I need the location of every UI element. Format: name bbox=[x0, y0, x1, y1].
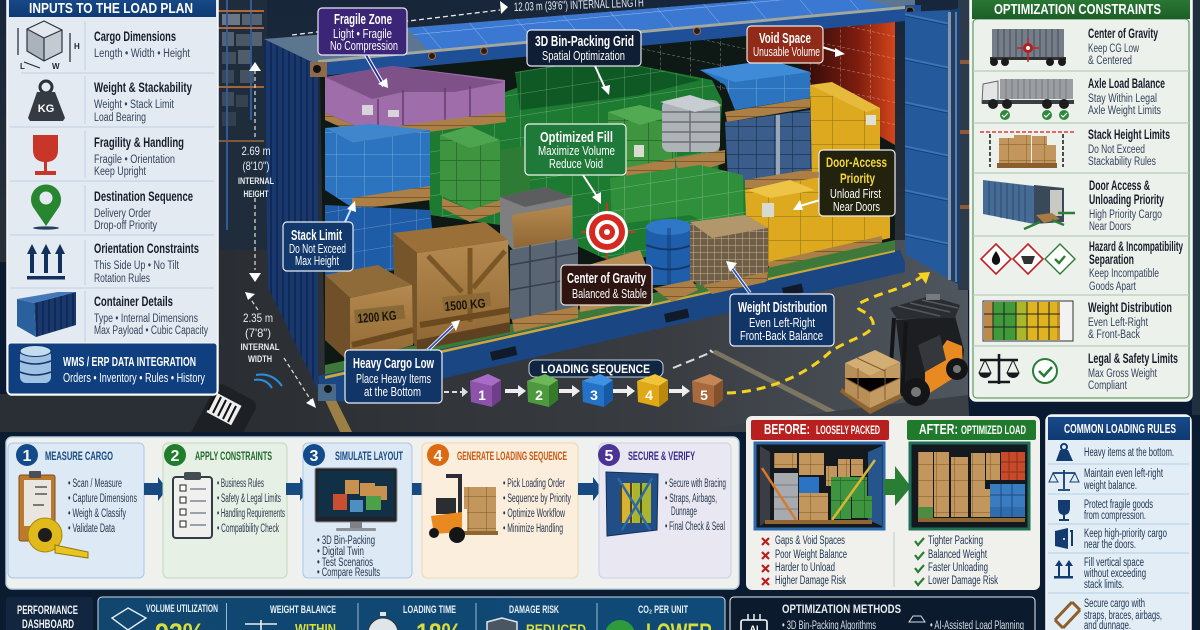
bullets step 1: • Scan / Measure bbox=[68, 478, 122, 490]
callout: fragile zone: No Compression bbox=[330, 39, 398, 53]
blue drums bbox=[646, 219, 698, 302]
step 2: apply constraints: APPLY CONSTRAINTS bbox=[195, 449, 272, 463]
void space red wall bbox=[800, 20, 895, 145]
callout: heavy cargo low: Place Heavy Items bbox=[356, 372, 431, 386]
text: legal and safety limits: Max Gross Weight bbox=[1088, 368, 1158, 380]
after heading bbox=[907, 420, 1036, 440]
text: weight distribution: Even Left-Right bbox=[1088, 317, 1149, 329]
step 4: generate loading sequence: GENERATE LOADING SEQUENCE bbox=[457, 449, 567, 463]
wire cage crate bbox=[690, 215, 768, 294]
cube 3: 3 bbox=[590, 387, 598, 403]
rule 2: Maintain even left-right bbox=[1084, 468, 1164, 480]
text: stack height limits bbox=[1088, 127, 1170, 168]
KPI: weight balance bbox=[245, 604, 336, 630]
text: cargo dimensions: Cargo Dimensions bbox=[94, 29, 176, 44]
cube 1: 1 bbox=[478, 387, 486, 403]
step 3: simulate layout: SIMULATE LAYOUT bbox=[335, 449, 403, 463]
icon: up arrows bbox=[1054, 560, 1073, 578]
bullets step 3: • 3D Bin-Packing bbox=[317, 535, 375, 547]
dimension: internal width: (7'8") bbox=[245, 326, 271, 340]
KPI: volume utilization: VOLUME UTILIZATION bbox=[146, 603, 218, 615]
icon: strap brace bbox=[1055, 602, 1080, 628]
KPI: loading time: LOADING TIME bbox=[403, 604, 456, 616]
list: after benefits: Balanced Weight bbox=[928, 549, 988, 561]
after heading: OPTIMIZED LOAD bbox=[961, 425, 1026, 437]
KPI: weight balance: WEIGHT BALANCE bbox=[270, 604, 336, 616]
text: fragility and handling: Fragile • Orientation bbox=[94, 154, 175, 166]
icon: stack height limits bbox=[980, 132, 1074, 168]
banner: WMS / ERP data integration: WMS / ERP DATA INTEGRATION bbox=[63, 354, 196, 369]
panel: before and after bbox=[746, 416, 1040, 590]
callout: door-access priority bbox=[793, 150, 895, 216]
callout: optimized fill: Maximize Volume bbox=[538, 144, 615, 158]
before heading: LOOSELY PACKED bbox=[816, 425, 880, 437]
loading sequence cubes bbox=[444, 374, 723, 407]
container doors bbox=[905, 8, 960, 285]
bullets step 2: • Handling Requirements bbox=[217, 508, 285, 520]
step 3: simulate layout bbox=[303, 443, 412, 579]
rule 5: without exceeding bbox=[1083, 568, 1146, 580]
text: stack height limits: Do Not Exceed bbox=[1088, 144, 1145, 156]
text: fragility and handling: Keep Upright bbox=[94, 166, 147, 178]
warehouse shelving backdrop bbox=[217, 0, 1200, 415]
icon: cube dimensions: H bbox=[74, 42, 80, 51]
after container illustration bbox=[910, 443, 1029, 529]
shipping container bbox=[264, 0, 960, 402]
bullets step 3: • Compare Results bbox=[317, 567, 380, 579]
step 2: apply constraints: 2 bbox=[171, 448, 180, 465]
cube 5 bbox=[692, 374, 723, 407]
icon: door access container bbox=[983, 180, 1075, 229]
crate: 1200 KG bbox=[325, 265, 413, 363]
callout: fragile zone: Light • Fragile bbox=[333, 27, 392, 41]
step 5: secure and verify: SECURE & VERIFY bbox=[628, 449, 695, 463]
text: weight and stackability: Weight & Stackability bbox=[94, 80, 192, 95]
callout: fragile zone: Fragile Zone bbox=[334, 12, 392, 28]
bullets step 3: • Digital Twin bbox=[317, 546, 364, 558]
text: stack height limits: Stackability Rules bbox=[1088, 156, 1156, 168]
text: destination sequence: Destination Sequence bbox=[94, 189, 193, 204]
step 4: generate loading sequence: 4 bbox=[434, 448, 443, 465]
rule 5 bbox=[1083, 557, 1146, 591]
weight label 1200: 1200 KG bbox=[357, 308, 397, 326]
yellow lower cargo bbox=[745, 172, 890, 276]
container interior bbox=[320, 20, 895, 378]
callout: void space: Unusable Volume bbox=[753, 45, 820, 59]
big arrow before to after bbox=[884, 466, 911, 506]
method list bbox=[782, 616, 1024, 630]
callout: door-access priority: Unload First bbox=[830, 187, 881, 201]
text: hazard and incompatibility separation: Goods Apart bbox=[1089, 281, 1137, 293]
container end wall bbox=[264, 39, 318, 390]
dimension: internal width: INTERNAL bbox=[240, 342, 280, 352]
callout: heavy cargo low bbox=[345, 320, 460, 403]
list: before drawbacks: Gaps & Void Spaces bbox=[775, 535, 845, 547]
callout: fragile zone bbox=[318, 8, 407, 88]
text: weight and stackability: Weight • Stack Limit bbox=[94, 99, 175, 111]
text: weight distribution: & Front-Back bbox=[1088, 329, 1140, 341]
cube 2: 2 bbox=[535, 387, 543, 403]
callout: optimized fill: Reduce Void bbox=[549, 157, 603, 171]
callout: void space: Void Space bbox=[759, 31, 811, 47]
step 5: secure and verify bbox=[598, 443, 731, 578]
panel: optimization constraints bbox=[970, 0, 1192, 401]
icon: cube dimensions: W bbox=[52, 62, 60, 71]
bullets step 5: • Straps, Airbags, bbox=[665, 493, 717, 505]
rule 6: straps, braces, airbags, bbox=[1084, 610, 1162, 622]
bullets step 5: • Secure with Bracing bbox=[665, 478, 726, 490]
text: orientation constraints bbox=[94, 241, 199, 285]
bullets step 4: • Pick Loading Order bbox=[503, 478, 565, 490]
cube 4 bbox=[637, 374, 668, 407]
text: orientation constraints: Orientation Constraints bbox=[94, 241, 199, 256]
rule 5: stack limits. bbox=[1084, 579, 1124, 591]
panel: optimization methods: OPTIMIZATION METHODS bbox=[782, 602, 901, 616]
rule 3: Protect fragile goods bbox=[1084, 499, 1153, 511]
text: weight and stackability: Load Bearing bbox=[94, 112, 146, 124]
white sacks bbox=[660, 95, 725, 177]
rule 4: near the doors. bbox=[1084, 539, 1136, 551]
icon: cube dimensions bbox=[18, 21, 80, 71]
cube 1 bbox=[470, 374, 501, 407]
KPI: damage risk: DAMAGE RISK bbox=[509, 604, 559, 616]
text: destination sequence: Drop-off Priority bbox=[94, 220, 157, 232]
dimension: internal height: INTERNAL bbox=[238, 176, 274, 186]
bullets step 4: • Sequence by Priority bbox=[503, 493, 571, 505]
bullets step 2 bbox=[217, 478, 285, 535]
arrow 3 to 4 bbox=[412, 477, 436, 501]
callout: 3D bin-packing grid bbox=[527, 30, 641, 95]
panel: KPI strip bbox=[98, 597, 725, 630]
dimension: internal height: HEIGHT bbox=[244, 189, 269, 199]
crate: 1500 KG bbox=[393, 222, 510, 350]
bullets step 1: • Weigh & Classify bbox=[68, 508, 126, 520]
bullets step 3: • Test Scenarios bbox=[317, 557, 373, 569]
callout: weight distribution: Weight Distribution bbox=[738, 300, 827, 316]
icon: AI chip bbox=[741, 614, 767, 630]
list: before drawbacks: Harder to Unload bbox=[775, 562, 835, 574]
text: hazard and incompatibility separation: Keep Incompatible bbox=[1089, 268, 1159, 280]
text: hazard and incompatibility separation bbox=[1089, 239, 1183, 293]
text: door access and unloading priority: High Priority Cargo bbox=[1089, 209, 1162, 221]
green translucent low block bbox=[610, 165, 744, 240]
panel: performance dashboard label bbox=[6, 597, 93, 630]
icon: checklist clipboard bbox=[173, 472, 212, 538]
arrow 1 to 2 bbox=[144, 477, 167, 501]
list: before drawbacks: Poor Weight Balance bbox=[775, 549, 847, 561]
text: destination sequence: Delivery Order bbox=[94, 208, 151, 220]
text: axle load balance: Stay Within Legal bbox=[1088, 93, 1157, 105]
panel: common loading rules bbox=[1046, 415, 1191, 630]
text: center of gravity: Center of Gravity bbox=[1088, 26, 1158, 41]
list: before drawbacks bbox=[762, 535, 847, 587]
callout: weight distribution: Front-Back Balance bbox=[740, 329, 823, 343]
before heading: BEFORE: bbox=[764, 421, 810, 438]
callout: door-access priority: Priority bbox=[840, 170, 875, 186]
rule 3 bbox=[1084, 499, 1153, 522]
arrow 2 to 3 bbox=[286, 477, 309, 501]
rule 5: Fill vertical space bbox=[1084, 557, 1144, 569]
step 1: measure cargo bbox=[8, 443, 144, 578]
step 3: simulate layout: 3 bbox=[310, 448, 319, 465]
stacked green boxes left bbox=[440, 126, 530, 222]
panel heading: INPUTS TO THE LOAD PLAN bbox=[29, 0, 193, 17]
callout: 3D bin-packing grid: Spatial Optimization bbox=[542, 49, 625, 63]
text: weight and stackability bbox=[94, 80, 192, 124]
icon: shipping container bbox=[17, 292, 76, 337]
bullets step 1: • Validate Data bbox=[68, 523, 115, 535]
rule 6: Secure cargo with bbox=[1084, 598, 1145, 610]
icon: cube dimensions: L bbox=[20, 62, 25, 71]
rule 2: weight balance. bbox=[1083, 480, 1137, 492]
bullets step 4: • Optimize Workflow bbox=[503, 508, 565, 520]
callout: stack limit bbox=[283, 201, 356, 271]
bullets step 5 bbox=[665, 478, 726, 533]
yellow upper cargo bbox=[810, 82, 880, 172]
blue wrapped top pallets bbox=[700, 60, 810, 122]
text: orientation constraints: This Side Up • No Tilt bbox=[94, 260, 180, 272]
step 5: secure and verify: 5 bbox=[605, 448, 614, 465]
container roof bbox=[264, 0, 915, 65]
cube 5: 5 bbox=[700, 387, 708, 403]
callout: optimized fill bbox=[525, 124, 626, 204]
panel: performance dashboard label: PERFORMANCE bbox=[17, 603, 78, 617]
loading sequence label bbox=[529, 350, 712, 377]
green floor and sill bbox=[325, 240, 895, 378]
icon: database bbox=[20, 346, 51, 383]
panel: five-step process bbox=[6, 437, 739, 589]
callout: heavy cargo low: Heavy Cargo Low bbox=[353, 356, 434, 372]
bullets step 3 bbox=[317, 535, 380, 579]
banner: WMS / ERP data integration bbox=[8, 343, 217, 394]
callout: weight distribution: Even Left-Right bbox=[749, 316, 815, 330]
text: fragility and handling: Fragility & Handling bbox=[94, 135, 184, 150]
icon: forklift bbox=[429, 476, 498, 543]
optimized fill green volume bbox=[425, 58, 752, 262]
bullets step 5: • Final Check & Seal bbox=[665, 521, 725, 533]
rule 3: from compression. bbox=[1084, 510, 1146, 522]
dimension: internal height bbox=[238, 62, 274, 282]
route arrow to doors bbox=[727, 272, 930, 393]
forklift with cartons bbox=[840, 294, 968, 414]
icon: heavy weight bbox=[1056, 444, 1073, 461]
bottom dark band bbox=[0, 432, 1200, 630]
cube 2 bbox=[527, 374, 558, 407]
dimension: internal length bbox=[292, 0, 644, 35]
bullets step 1: • Capture Dimensions bbox=[68, 493, 137, 505]
callout: center of gravity bbox=[561, 265, 652, 305]
bullets step 5: Dunnage bbox=[671, 506, 697, 518]
steel and wood crates centre bbox=[500, 187, 578, 332]
rule 6 bbox=[1084, 598, 1162, 630]
text: center of gravity: Keep CG Low bbox=[1088, 43, 1139, 55]
text: cargo dimensions bbox=[94, 29, 191, 60]
top beam bbox=[318, 5, 916, 76]
list: after benefits: Lower Damage Risk bbox=[928, 575, 998, 587]
dimension: internal height: (8'10") bbox=[242, 159, 270, 173]
text: legal and safety limits: Compliant bbox=[1088, 380, 1128, 392]
rules heading bbox=[1048, 417, 1190, 440]
callout: stack limit: Do Not Exceed bbox=[289, 242, 346, 256]
callout: door-access priority: Door-Access bbox=[826, 154, 887, 170]
step 1: measure cargo: 1 bbox=[23, 448, 32, 465]
text: container details: Type • Internal Dimensions bbox=[94, 313, 198, 325]
text: axle load balance: Axle Weight Limits bbox=[1088, 105, 1161, 117]
bullets step 4 bbox=[503, 478, 571, 535]
step 1: measure cargo: MEASURE CARGO bbox=[45, 449, 113, 463]
bullets step 4: • Minimize Handling bbox=[503, 523, 563, 535]
text: orientation constraints: Rotation Rules bbox=[94, 273, 150, 285]
icon: weight distribution top view bbox=[983, 301, 1073, 341]
bullets step 2: • Safety & Legal Limits bbox=[217, 493, 281, 505]
panel: optimization methods bbox=[730, 597, 1035, 630]
blue-gray crates bbox=[725, 110, 826, 190]
text: center of gravity bbox=[1088, 26, 1158, 67]
KPI: loading time bbox=[368, 604, 462, 630]
text: destination sequence bbox=[94, 189, 193, 232]
before container illustration bbox=[755, 443, 884, 529]
icon: monitor with simulation bbox=[315, 468, 397, 531]
icon: container centre of gravity bbox=[990, 29, 1066, 66]
dimension: internal width: WIDTH bbox=[248, 354, 272, 364]
callout: weight distribution bbox=[726, 261, 834, 346]
callout: door-access priority: Near Doors bbox=[833, 200, 880, 214]
KPI: CO2 per unit bbox=[605, 604, 712, 630]
callout: optimized fill: Optimized Fill bbox=[540, 130, 613, 146]
list: after benefits: Tighter Packing bbox=[928, 535, 983, 547]
callout: heavy cargo low: at the Bottom bbox=[364, 385, 421, 399]
step 2: apply constraints bbox=[163, 443, 287, 578]
bullets step 2: • Business Rules bbox=[217, 478, 264, 490]
list: after benefits bbox=[915, 535, 998, 587]
text: cargo dimensions: Length • Width • Height bbox=[94, 48, 191, 60]
text: container details: Container Details bbox=[94, 294, 173, 309]
step 4: generate loading sequence bbox=[422, 443, 578, 578]
text: fragility and handling bbox=[94, 135, 184, 178]
callout: center of gravity: Center of Gravity bbox=[567, 271, 646, 287]
banner: WMS / ERP data integration: Orders • Inventory • Rules • History bbox=[63, 371, 206, 385]
icon: kg weight bbox=[28, 81, 65, 121]
callout: stack limit: Max Height bbox=[295, 254, 339, 268]
weight label 1500: 1500 KG bbox=[444, 295, 486, 314]
icon: fragile glass bbox=[33, 135, 58, 175]
text: axle load balance bbox=[1088, 76, 1165, 117]
text: hazard and incompatibility separation: Separation bbox=[1089, 252, 1134, 267]
icon: scales and check bbox=[979, 354, 1057, 384]
fragile purple pallets bbox=[325, 66, 506, 141]
rear green boxes bbox=[608, 105, 675, 178]
icon: clipboard and tape bbox=[19, 471, 88, 558]
interior rear grid bbox=[640, 26, 805, 90]
cube 4: 4 bbox=[645, 387, 653, 403]
list: after benefits: Faster Unloading bbox=[928, 562, 988, 574]
callout: 3D bin-packing grid: 3D Bin-Packing Grid bbox=[535, 34, 634, 50]
icon: this side up arrows bbox=[27, 244, 65, 280]
icon: hazard diamonds bbox=[981, 244, 1075, 274]
target: centre of gravity bbox=[581, 203, 636, 259]
text: door access and unloading priority: Door Access & bbox=[1089, 178, 1150, 193]
before heading bbox=[751, 420, 889, 440]
icon: kg weight: KG bbox=[38, 103, 54, 115]
icon: location pin bbox=[31, 185, 61, 230]
icon: truck axle load bbox=[982, 79, 1074, 120]
cube 3 bbox=[582, 374, 613, 407]
after heading: AFTER: bbox=[919, 421, 958, 438]
callout: center of gravity: Balanced & Stable bbox=[572, 287, 647, 301]
KPI: damage risk bbox=[487, 604, 586, 630]
text: door access and unloading priority: Near Doors bbox=[1089, 221, 1131, 233]
list: before drawbacks: Higher Damage Risk bbox=[775, 575, 846, 587]
arrow 4 to 5 bbox=[578, 477, 602, 501]
panel: inputs to the load plan bbox=[7, 0, 218, 395]
dimension: internal height: 2.69 m bbox=[242, 144, 271, 158]
callout: void space bbox=[747, 26, 845, 63]
text: door access and unloading priority bbox=[1089, 178, 1164, 233]
KPI: volume utilization bbox=[112, 603, 218, 630]
loading sequence label: LOADING SEQUENCE bbox=[541, 362, 650, 376]
text: container details bbox=[94, 294, 208, 337]
cartons beneath target bbox=[578, 250, 648, 312]
dimension: internal width bbox=[240, 292, 316, 408]
icon: fragile glass bbox=[1058, 500, 1070, 521]
rule 2 bbox=[1083, 468, 1164, 492]
bullets step 1 bbox=[68, 478, 137, 535]
callout: stack limit: Stack Limit bbox=[291, 228, 342, 244]
wrapped blue stack bbox=[325, 124, 433, 280]
text: weight distribution bbox=[1088, 300, 1172, 341]
handheld barcode scanner bbox=[183, 374, 282, 468]
text: center of gravity: & Centered bbox=[1088, 55, 1132, 67]
icon: secured container bbox=[606, 472, 658, 536]
icon: balance scale bbox=[1049, 470, 1079, 490]
icon: door bbox=[1055, 528, 1072, 549]
text: container details: Max Payload • Cubic Capacity bbox=[94, 325, 208, 337]
KPI: CO2 per unit: CO₂ PER UNIT bbox=[638, 604, 688, 616]
dimension: internal width: 2.35 m bbox=[243, 311, 273, 325]
rule 4 bbox=[1084, 528, 1167, 551]
text: legal and safety limits bbox=[1088, 351, 1178, 392]
bullets step 2: • Compatibility Check bbox=[217, 523, 279, 535]
